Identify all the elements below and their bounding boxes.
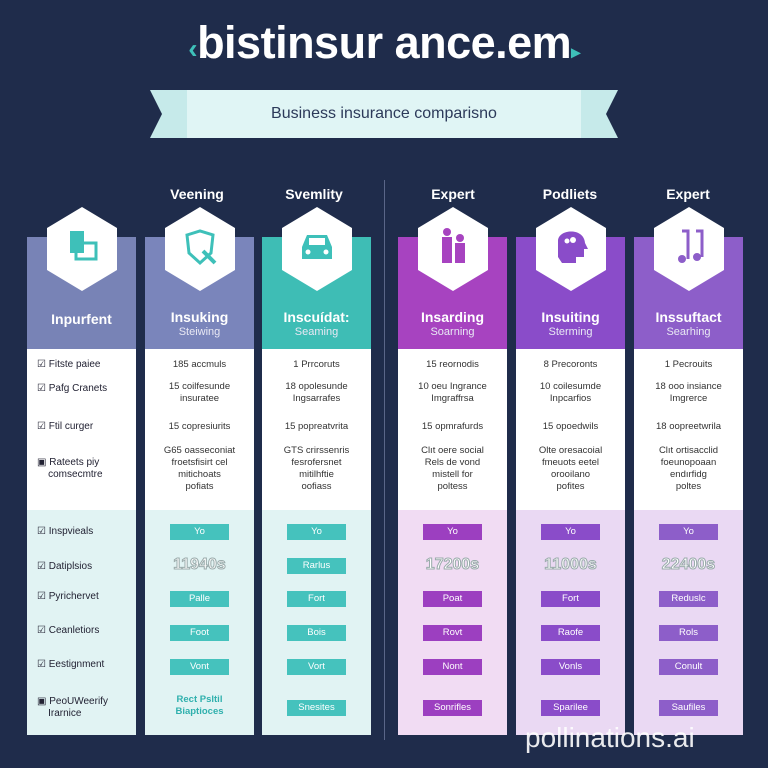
panel: column 3: 1 Prrcoruts [293, 359, 340, 370]
panel: column 6: Saufiles [672, 702, 705, 713]
panel: column 3: Bois [307, 627, 326, 638]
panel: column 6: Yo [683, 526, 694, 537]
panel: column 2: mitichoats [178, 469, 221, 480]
panel: column 4: Sonrifles [434, 702, 471, 713]
panel: column 2: Insuking [171, 309, 228, 325]
panel: column 2: Vont [190, 661, 209, 672]
panel: column 3: Vort [308, 661, 325, 672]
panel: column 6: foeunopoaan [661, 457, 716, 468]
panel: column 6: Inssuftact [655, 309, 722, 325]
title: ‹bistinsur ance.em▸ [188, 17, 580, 68]
panel: column 6: 22400s [662, 556, 715, 573]
panel: column 3: Rarlus [303, 560, 330, 571]
panel: column 1 features: ☑ Eestignment [37, 659, 104, 670]
panel: column 2: 15 coilfesunde [169, 381, 230, 392]
column labels: Podliets [543, 186, 597, 202]
panel: column 6: Reduslc [671, 593, 706, 604]
panel: column 1 features: ☑ Fitste paiee [37, 359, 100, 370]
panel: column 2: Palle [189, 593, 210, 604]
panel: column 2: Yo [194, 526, 205, 537]
panel: column 1 features: ☑ Ftil curger [37, 421, 93, 432]
panel: column 5: pofites [556, 481, 584, 492]
panel: column 5: 8 Precoronts [544, 359, 597, 370]
panel: column 3: Ingsarrafes [293, 393, 340, 404]
panel: column 3: Inscuídat: [283, 309, 350, 325]
panel: column 5: Vonls [559, 661, 582, 672]
watermark: pollinations.ai [525, 722, 695, 753]
column labels: Expert [431, 186, 475, 202]
panel: column 1 features [27, 207, 136, 735]
panel: column 5: 11000s [544, 556, 597, 573]
panel: column 3: GTS crirssenris [284, 445, 349, 456]
panel: column 5: 15 opoedwils [543, 421, 598, 432]
panel: column 1 features: ▣ PeoUWeerify [37, 696, 108, 707]
panel: column 4 [398, 207, 507, 735]
panel: column 3: Snesites [298, 702, 335, 713]
panel: column 1 features: ☑ Ceanletiors [37, 625, 99, 636]
panel: column 5: Sparilee [553, 702, 588, 713]
panel: column 6 [634, 207, 743, 735]
panel: column 6: Conult [675, 661, 702, 672]
panel: column 4: Nont [442, 661, 463, 672]
panel: column 4: 15 opmrafurds [422, 421, 483, 432]
panel: column 1 features: ☑ Inspvieals [37, 526, 93, 537]
panel: column 4: Poat [443, 593, 462, 604]
panel: column 5: Fort [562, 593, 579, 604]
panel: column 4: 15 reornodis [426, 359, 479, 370]
panel: column 5: Insuiting [541, 309, 600, 325]
panel: column 5: Inpcarfios [550, 393, 591, 404]
panel: column 4: Soarning [430, 326, 475, 338]
panel: column 4: Clıt oere social [421, 445, 484, 456]
panel: column 1 features: Inpurfent [51, 311, 112, 327]
panel: column 5: 10 coilesumde [540, 381, 601, 392]
panel: column 6: endırfidg [670, 469, 707, 480]
panel: column 2: Foot [190, 627, 209, 638]
panel: column 2: froetsfisirt cel [172, 457, 227, 468]
panel: column 6: poltes [676, 481, 701, 492]
panel: column 2: Steiwing [179, 326, 220, 338]
panel: column 5: orooilano [551, 469, 590, 480]
panel: column 6: Searhing [666, 326, 711, 338]
panel: column 4: Imgraffrsa [431, 393, 474, 404]
panel: column 3: Fort [308, 593, 325, 604]
panel: column 3: 15 popreatvrita [285, 421, 348, 432]
panel: column 3: mitilhftie [299, 469, 334, 480]
panel: column 6: Imgrerce [670, 393, 707, 404]
panel: column 3: Seaming [295, 326, 338, 338]
panel: column 4: poltess [437, 481, 468, 492]
panel: column 1 features: ☑ Pafg Cranets [37, 383, 107, 394]
panel: column 6: 18 ooo insiance [655, 381, 722, 392]
panel: column 5: Olte oresacoial [539, 445, 602, 456]
panel: column 2: insuratee [180, 393, 219, 404]
panel: column 6: 1 Pecrouits [665, 359, 712, 370]
panel: column 2: pofiats [186, 481, 214, 492]
ribbon banner: Business insurance comparisno [271, 105, 497, 122]
panel: column 2: G65 oasseconiat [164, 445, 235, 456]
panel: column 3: 18 opolesunde [285, 381, 348, 392]
ribbon banner [150, 90, 618, 138]
panel: column 6: 18 oopreetwrila [656, 421, 721, 432]
panel: column 1 features: ☑ Datiplsios [37, 561, 92, 572]
panel: column 2: 185 accmuls [173, 359, 226, 370]
panel: column 3: oofiass [301, 481, 332, 492]
panel: column 2: 11940s [173, 556, 226, 573]
panel: column 4: 17200s [426, 556, 479, 573]
panel: column 5: Sterming [548, 326, 593, 338]
column labels: Svemlity [285, 186, 343, 202]
panel: column 2: Biaptioces [175, 706, 224, 717]
panel: column 5 [516, 207, 625, 735]
panel: column 5: fmeuots eetel [542, 457, 599, 468]
panel: column 4: Insarding [421, 309, 484, 325]
column labels: Veening [170, 186, 224, 202]
panel: column 5: Yo [565, 526, 576, 537]
panel: column 5: Raofe [558, 627, 583, 638]
panel: column 2 [145, 207, 254, 735]
panel: column 6: Clıt ortisacclid [659, 445, 718, 456]
panel: column 2: 15 copresiurits [169, 421, 230, 432]
panel: column 4: Rovt [443, 627, 462, 638]
panel: column 2: Rect Psltil [177, 694, 222, 705]
panel: column 3: Yo [311, 526, 322, 537]
panel: column 4: mistell for [432, 469, 473, 480]
panel: column 1 features: Irarnice [48, 708, 81, 719]
panel: column 1 features: comsecmtre [48, 469, 103, 480]
panel: column 1 features: ☑ Pyrichervet [37, 591, 99, 602]
panel: column 4: Yo [447, 526, 458, 537]
panel: column 1 features: ▣ Rateets piy [37, 457, 99, 468]
panel: column 6: Rols [679, 627, 698, 638]
panel: column 4: 10 oeu Ingrance [418, 381, 487, 392]
panel: column 3 [262, 207, 371, 735]
panel: column 4: Rels de vond [425, 457, 480, 468]
column labels [170, 186, 710, 202]
panel: column 3: fesrofersnet [291, 457, 342, 468]
column labels: Expert [666, 186, 710, 202]
